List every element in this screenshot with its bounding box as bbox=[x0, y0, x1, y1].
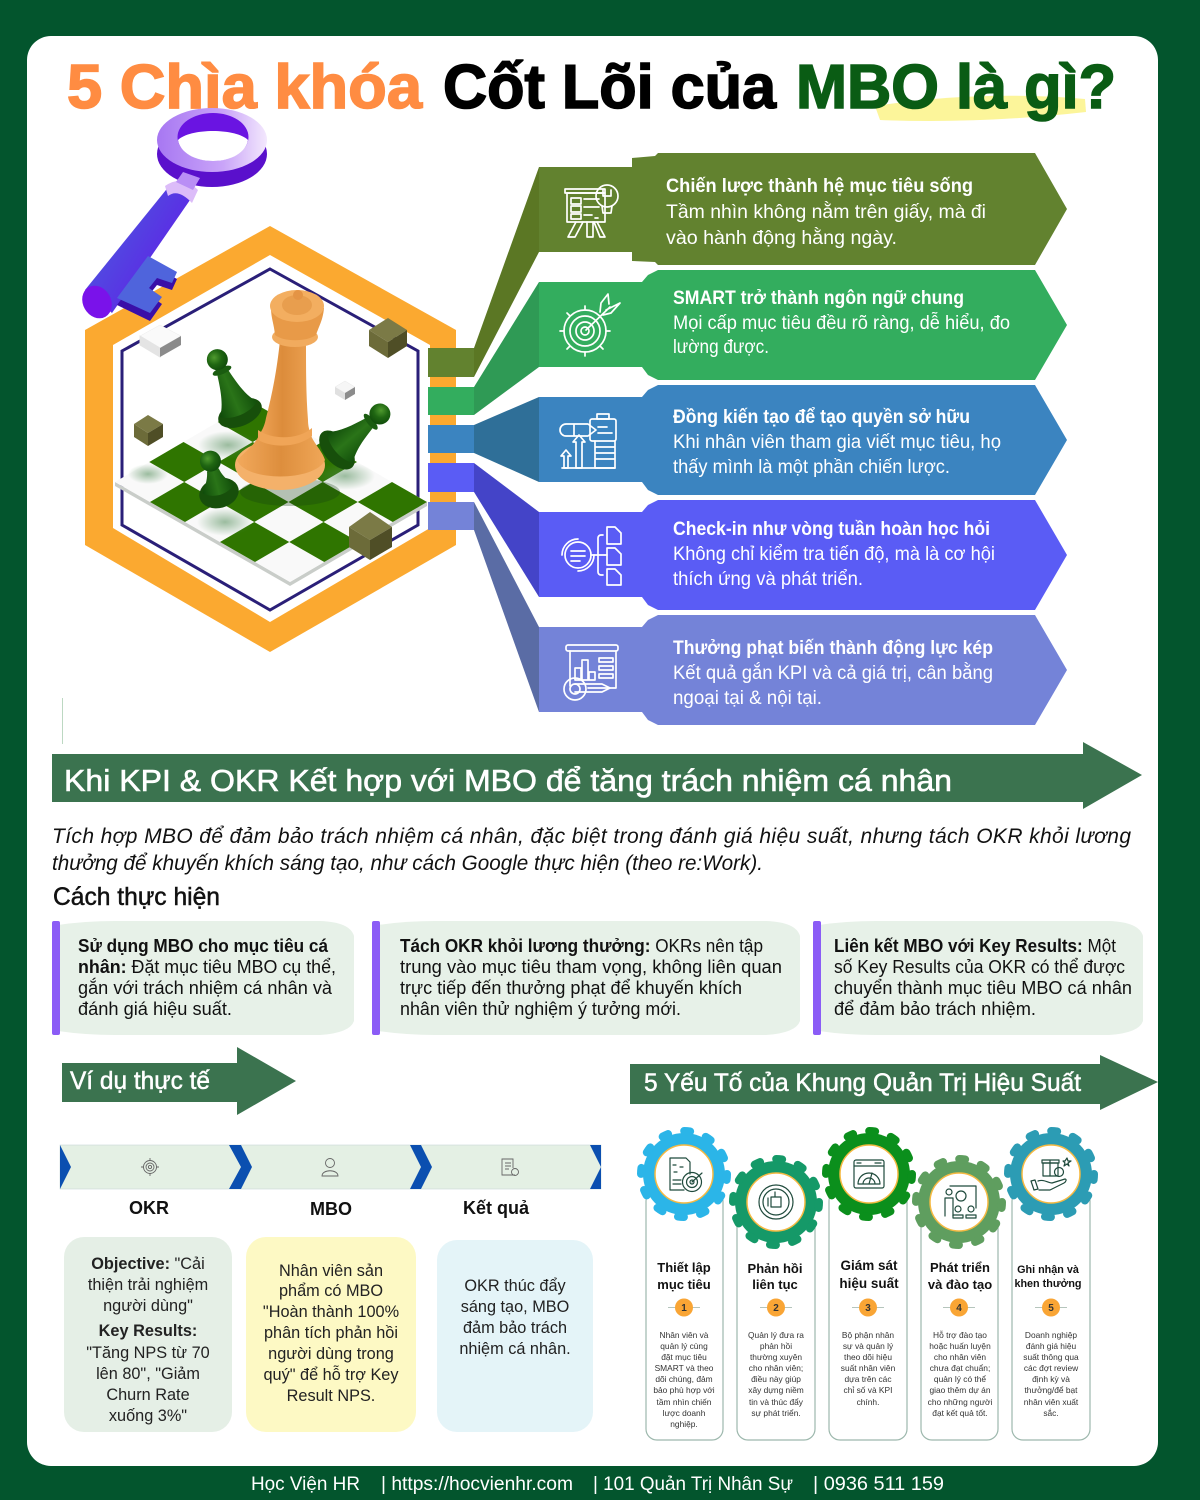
factor card 4: training bbox=[916, 1159, 1002, 1440]
factor card 1: goal setting: lược doanh bbox=[663, 1408, 706, 1418]
text: ribbon 3 bbox=[673, 407, 1001, 478]
factor card 4: training: đạt kết quả tốt. bbox=[932, 1408, 988, 1418]
heading: how to: Cách thực hiện bbox=[53, 883, 220, 911]
intro paragraph: thưởng để khuyến khích sáng tạo, như cách Google thực hiện (theo re:Work). bbox=[52, 852, 763, 875]
example card: MBO: người dùng trong bbox=[268, 1345, 394, 1363]
ribbon 1 bbox=[428, 153, 1067, 377]
icon: report board with gear and pencil bbox=[564, 645, 618, 700]
factor card 2: feedback: Quản lý đưa ra bbox=[748, 1330, 804, 1340]
text: ribbon 4 bbox=[673, 519, 995, 590]
factor card 1: goal setting: quản lý cùng bbox=[660, 1341, 708, 1351]
factor card 3: monitoring: Giám sát bbox=[840, 1258, 898, 1273]
factor card 5: recognition: Doanh nghiệp bbox=[1025, 1330, 1077, 1340]
title: 5 Chìa khóa bbox=[67, 53, 423, 122]
factor card 4: training: và đào tạo bbox=[928, 1277, 992, 1292]
factor card 2: feedback bbox=[733, 1159, 819, 1440]
factor card 2: feedback: Phản hồi bbox=[748, 1261, 802, 1276]
gear 5 bbox=[1008, 1131, 1094, 1217]
ribbon 2 bbox=[428, 270, 1067, 415]
gear 4 bbox=[916, 1159, 1002, 1245]
cube: white top left bbox=[140, 325, 181, 357]
factor card 1: goal setting: mục tiêu bbox=[657, 1277, 711, 1292]
title bbox=[67, 53, 1116, 122]
example card: MBO: phân tích phản hồi bbox=[264, 1324, 398, 1342]
step card 2: trực tiếp đến thưởng phạt để khuyến khích bbox=[400, 978, 742, 998]
section banner: KPI and OKR: Khi KPI & OKR Kết hợp với MBO để tăng trách nhiệm cá nhân bbox=[64, 763, 952, 798]
factor card 5: recognition: định kỳ và bbox=[1032, 1374, 1070, 1384]
factor card 3: monitoring: 3 bbox=[865, 1303, 871, 1314]
example card: MBO: quý" để hỗ trợ Key bbox=[263, 1365, 399, 1384]
text: ribbon 1: Tầm nhìn không nằm trên giấy, mà đi bbox=[666, 201, 986, 223]
gear 1 bbox=[641, 1131, 727, 1217]
labels: OKR, MBO, result bbox=[129, 1198, 530, 1219]
factor card 1: goal setting: 1 bbox=[681, 1303, 687, 1314]
factor card 3: monitoring: chính. bbox=[857, 1397, 879, 1407]
example card: result: đảm bảo trách bbox=[463, 1319, 567, 1337]
icon: report bbox=[502, 1159, 518, 1176]
text: ribbon 4: Check-in như vòng tuần hoàn học hỏi bbox=[673, 519, 990, 540]
example card: MBO: "Hoàn thành 100% bbox=[263, 1303, 399, 1321]
example card: MBO: phẩm có MBO bbox=[279, 1282, 383, 1300]
factor card 2: feedback: xây dựng niềm bbox=[748, 1385, 804, 1395]
step card 3 bbox=[813, 921, 1143, 1035]
step card 3: số Key Results của OKR có thể được bbox=[834, 957, 1125, 977]
factor card 1: goal setting: đặt mục tiêu bbox=[661, 1352, 707, 1362]
ribbon 4 bbox=[428, 463, 1067, 610]
icon: pencil, plans and growth arrows bbox=[560, 414, 616, 468]
factor card 3: monitoring bbox=[826, 1131, 912, 1440]
text: ribbon 5: Kết quả gắn KPI và cả giá trị, cân bằng bbox=[673, 662, 993, 684]
example card: OKR: thiện trải nghiệm bbox=[88, 1276, 208, 1294]
banner: five performance factors bbox=[630, 1055, 1158, 1110]
footer contact line bbox=[251, 1474, 944, 1495]
thin vertical accent line bbox=[62, 698, 64, 744]
example card: result: sáng tạo, MBO bbox=[461, 1298, 569, 1316]
factor card 5: recognition: Ghi nhận và bbox=[1017, 1264, 1080, 1276]
factor card 5: recognition bbox=[1008, 1131, 1094, 1440]
example card: result bbox=[437, 1240, 593, 1432]
text: ribbon 3: Đồng kiến tạo để tạo quyền sở hữu bbox=[673, 407, 970, 428]
example card: OKR: Objective: "Cải bbox=[91, 1255, 205, 1273]
text: ribbon 4: Không chỉ kiểm tra tiến độ, mà là cơ hội bbox=[673, 544, 995, 565]
step card 1 bbox=[52, 921, 354, 1035]
example card: result: OKR thúc đẩy bbox=[464, 1277, 567, 1295]
factor card 1: goal setting: bảo phù hợp với bbox=[653, 1385, 715, 1395]
factor card 1: goal setting: dõi chúng, đảm bbox=[655, 1374, 713, 1384]
icon: person bbox=[322, 1158, 338, 1176]
footer contact line: | 101 Quản Trị Nhân Sự bbox=[593, 1474, 793, 1495]
banner: real example bbox=[62, 1047, 296, 1115]
ribbon 3 bbox=[428, 385, 1067, 495]
footer contact line: | https://hocvienhr.com bbox=[381, 1474, 573, 1495]
chessboard bbox=[115, 402, 427, 586]
factor card 2: feedback: điều này giúp bbox=[751, 1374, 801, 1384]
banner: five performance factors: 5 Yếu Tố của Khung Quản Trị Hiệu Suất bbox=[644, 1069, 1081, 1097]
example card: OKR: Key Results: bbox=[99, 1322, 197, 1340]
example card: OKR: xuống 3%" bbox=[109, 1407, 187, 1425]
text: ribbon 3: thấy mình là một phần chiến lược. bbox=[673, 457, 950, 478]
ribbon 5 bbox=[428, 502, 1067, 725]
example card: OKR: người dùng" bbox=[103, 1297, 193, 1315]
step card 2: nhân viên thử nghiệm ý tưởng mới. bbox=[400, 999, 681, 1019]
text: ribbon 1: vào hành động hằng ngày. bbox=[666, 227, 897, 249]
factor card 2: feedback: phản hồi bbox=[760, 1341, 792, 1351]
cube: olive left bbox=[134, 415, 163, 446]
factor card 5: recognition: sắc. bbox=[1043, 1408, 1059, 1418]
factor card 3: monitoring: chỉ số và KPI bbox=[844, 1385, 892, 1395]
hexagon frame bbox=[85, 226, 456, 652]
example card: MBO: Nhân viên sản bbox=[279, 1262, 383, 1280]
factor card 4: training: cho những người bbox=[928, 1397, 992, 1407]
step card 1: Sử dụng MBO cho mục tiêu cá bbox=[78, 936, 329, 956]
factor card 2: feedback: 2 bbox=[773, 1303, 779, 1314]
banner: real example: Ví dụ thực tế bbox=[70, 1067, 210, 1095]
step card 2: trung vào mục tiêu tham vọng, không liên quan bbox=[400, 957, 782, 977]
intro paragraph bbox=[52, 825, 1131, 875]
step card 3: để đảm bảo trách nhiệm. bbox=[834, 999, 1036, 1019]
text: ribbon 2: Mọi cấp mục tiêu đều rõ ràng, dễ hiểu, đo bbox=[673, 312, 1010, 334]
factor card 5: recognition: nhân viên xuất bbox=[1024, 1397, 1079, 1407]
factor card 1: goal setting bbox=[641, 1131, 727, 1440]
labels: OKR, MBO, result: Kết quả bbox=[463, 1198, 530, 1218]
step card 1: gắn với trách nhiệm cá nhân và bbox=[78, 977, 333, 998]
factor card 4: training: cho nhân viên bbox=[934, 1352, 986, 1362]
factor card 4: training: giao thêm dự án bbox=[929, 1385, 991, 1395]
title: MBO là gì? bbox=[796, 53, 1116, 122]
example card: OKR: lên 80", "Giảm bbox=[96, 1365, 200, 1383]
factor card 2: feedback: cho nhân viên; bbox=[749, 1363, 803, 1373]
factor card 5: recognition: 5 bbox=[1048, 1303, 1054, 1314]
text: ribbon 5 bbox=[673, 638, 993, 709]
text: ribbon 1 bbox=[666, 176, 986, 249]
factor card 2: feedback: thường xuyên bbox=[750, 1352, 802, 1362]
title highlight stroke bbox=[875, 96, 1086, 121]
step card 2: Tách OKR khỏi lương thưởng: OKRs nên tập bbox=[400, 936, 763, 956]
example card: MBO: Result NPS. bbox=[287, 1387, 375, 1405]
footer contact line: | 0936 511 159 bbox=[813, 1474, 944, 1495]
pawn: upper left bbox=[192, 341, 266, 434]
factor card 4: training: Phát triển bbox=[930, 1260, 990, 1275]
factor card 4: training: quản lý có thể bbox=[934, 1374, 986, 1384]
step card 3: Liên kết MBO với Key Results: Một bbox=[834, 936, 1116, 956]
gear 2 bbox=[733, 1159, 819, 1245]
title: Cốt Lõi của bbox=[443, 53, 776, 122]
factor card 1: goal setting: Thiết lập bbox=[657, 1260, 711, 1275]
queen chess piece bbox=[235, 290, 325, 490]
factor card 3: monitoring: suất nhân viên bbox=[841, 1363, 896, 1373]
factor card 3: monitoring: Bộ phận nhân bbox=[842, 1330, 894, 1340]
text: ribbon 1: Chiến lược thành hệ mục tiêu sống bbox=[666, 176, 973, 197]
cube: small white bbox=[335, 381, 355, 400]
icon: strategy board and bulb bbox=[565, 185, 618, 237]
factor card 1: goal setting: Nhân viên và bbox=[660, 1330, 709, 1340]
factor card 2: feedback: sự phát triển. bbox=[751, 1408, 801, 1418]
step card 1: nhân: Đặt mục tiêu MBO cụ thể, bbox=[78, 957, 336, 977]
example card: MBO bbox=[246, 1237, 416, 1432]
step card 1: đánh giá hiệu suất. bbox=[78, 999, 232, 1019]
text: ribbon 2 bbox=[673, 288, 1010, 358]
example card: OKR bbox=[64, 1237, 232, 1432]
labels: OKR, MBO, result: OKR bbox=[129, 1198, 169, 1218]
step card 2 bbox=[372, 921, 800, 1035]
icon: gear target with arrow bbox=[560, 294, 620, 356]
factor card 3: monitoring: theo dõi hiệu bbox=[844, 1352, 892, 1362]
text: ribbon 4: thích ứng và phát triển. bbox=[673, 569, 863, 590]
example card: result: nhiệm cá nhân. bbox=[459, 1340, 571, 1358]
text: ribbon 5: Thưởng phạt biến thành động lực kép bbox=[673, 638, 993, 659]
factor card 4: training: chưa đạt chuẩn; bbox=[930, 1363, 990, 1373]
key illustration bbox=[76, 108, 267, 324]
factor card 1: goal setting: tầm nhìn chiến bbox=[657, 1397, 712, 1407]
factor card 5: recognition: các đợt review bbox=[1024, 1363, 1079, 1373]
factor card 5: recognition: đánh giá hiệu bbox=[1026, 1341, 1076, 1351]
factor card 4: training: Hỗ trợ đào tạo bbox=[933, 1330, 987, 1340]
text: ribbon 5: ngoại tại & nội tại. bbox=[673, 688, 822, 709]
footer contact line: Học Viện HR bbox=[251, 1474, 360, 1495]
text: ribbon 2: lường được. bbox=[673, 337, 769, 358]
step card 3: chuyển thành mục tiêu MBO cá nhân bbox=[834, 978, 1132, 998]
factor card 3: monitoring: hiệu suất bbox=[839, 1276, 899, 1291]
factor card 5: recognition: khen thưởng bbox=[1014, 1278, 1082, 1290]
factor card 2: feedback: tin và thúc đẩy bbox=[749, 1397, 804, 1407]
labels: OKR, MBO, result: MBO bbox=[310, 1199, 352, 1219]
example card: OKR: "Tăng NPS từ 70 bbox=[86, 1344, 210, 1362]
factor card 4: training: 4 bbox=[956, 1303, 962, 1314]
pawn: lower left bbox=[188, 446, 242, 513]
factor card 5: recognition: suất thông qua bbox=[1023, 1352, 1079, 1362]
cube: olive top right bbox=[369, 318, 407, 358]
factor card 1: goal setting: SMART và theo bbox=[655, 1363, 714, 1373]
text: ribbon 2: SMART trở thành ngôn ngữ chung bbox=[673, 288, 964, 309]
process chevron strip bbox=[60, 1145, 601, 1189]
section banner: KPI and OKR bbox=[52, 742, 1142, 809]
icon: review tree of documents bbox=[562, 527, 621, 585]
cube: olive bottom bbox=[349, 512, 392, 560]
factor card 3: monitoring: sự và quản lý bbox=[843, 1341, 894, 1351]
text: ribbon 3: Khi nhân viên tham gia viết mục tiêu, họ bbox=[673, 432, 1001, 453]
factor card 5: recognition: thưởng/để bạt bbox=[1024, 1385, 1078, 1395]
gear 3 bbox=[826, 1131, 912, 1217]
factor card 4: training: hoặc huấn luyện bbox=[929, 1341, 991, 1351]
icon: target bbox=[141, 1158, 159, 1176]
factor card 2: feedback: liên tục bbox=[752, 1277, 798, 1292]
pawn: right bbox=[312, 390, 403, 476]
example card: OKR: Churn Rate bbox=[106, 1386, 190, 1404]
intro paragraph: Tích hợp MBO để đảm bảo trách nhiệm cá nhân, đặc biệt trong đánh giá hiệu suất, nhưng tách OKR khỏi lương bbox=[52, 825, 1131, 848]
factor card 3: monitoring: dựa trên các bbox=[844, 1374, 892, 1384]
factor card 1: goal setting: nghiệp. bbox=[670, 1419, 698, 1429]
